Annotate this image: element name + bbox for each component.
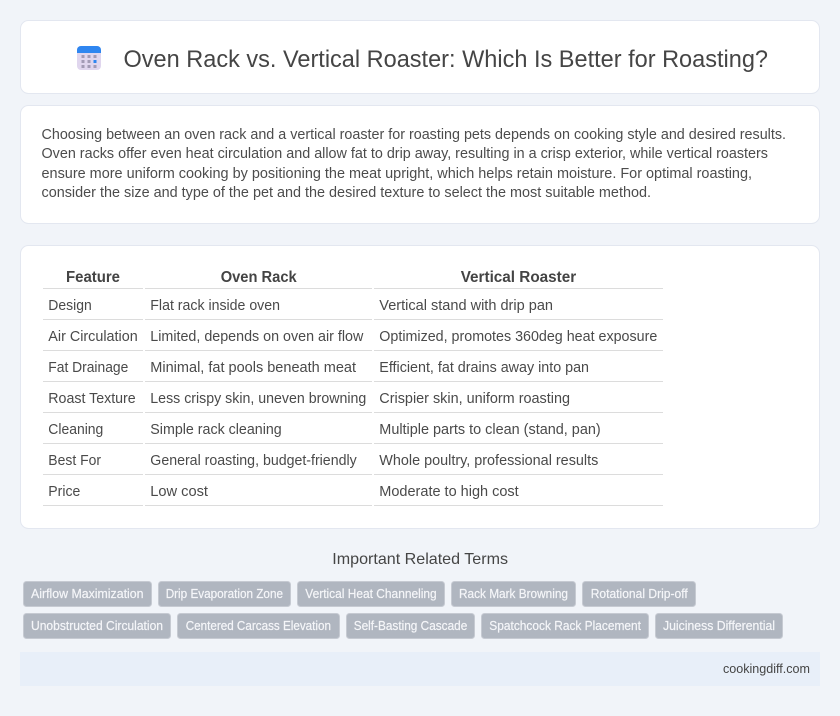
panel: title header bbox=[20, 20, 820, 94]
tag: Rotational Drip-off: Rotational Drip-off bbox=[591, 587, 688, 601]
table row: air circulation: Air Circulation bbox=[48, 329, 138, 345]
table row: air circulation: Optimized, promotes 360deg heat exposure bbox=[379, 329, 657, 345]
table header row: Vertical Roaster bbox=[461, 269, 576, 286]
panel: introduction bbox=[20, 106, 820, 224]
tag: Spatchcock Rack Placement: Spatchcock Rack Placement bbox=[489, 619, 641, 633]
table row: fat drainage: Minimal, fat pools beneath meat bbox=[150, 360, 356, 376]
footer source text: cookingdiff.com bbox=[723, 662, 810, 676]
table row: cleaning: Cleaning bbox=[48, 422, 103, 438]
tag: Vertical Heat Channeling: Vertical Heat Channeling bbox=[305, 587, 437, 601]
table row: design bbox=[48, 298, 553, 314]
table row: cleaning: Multiple parts to clean (stand, pan) bbox=[379, 422, 601, 438]
tag: Airflow Maximization: Airflow Maximization bbox=[31, 587, 144, 601]
table header row: Oven Rack bbox=[221, 269, 297, 286]
text block: introduction paragraph: consider the size and type of the pet and the desired texture to select the most suitable method. bbox=[42, 185, 651, 201]
table row: fat drainage: Efficient, fat drains away into pan bbox=[379, 360, 589, 376]
table row: best for: Best For bbox=[48, 453, 101, 469]
tag: Airflow Maximization bbox=[24, 582, 152, 606]
table row: air circulation bbox=[48, 329, 657, 345]
table row: price bbox=[48, 484, 519, 500]
table row: cleaning bbox=[48, 422, 601, 438]
table row: air circulation: Limited, depends on oven air flow bbox=[150, 329, 364, 345]
table row: best for bbox=[48, 453, 598, 469]
table row: design: Flat rack inside oven bbox=[150, 298, 280, 314]
tag: Rack Mark Browning bbox=[452, 582, 576, 606]
icon: calendar bbox=[77, 46, 101, 70]
table row: design: Design bbox=[48, 298, 92, 314]
tag: Juiciness Differential: Juiciness Differential bbox=[663, 619, 775, 633]
tag: Juiciness Differential bbox=[656, 614, 782, 638]
heading: related terms: Important Related Terms bbox=[332, 551, 508, 568]
table row: price: Low cost bbox=[150, 484, 208, 500]
table row: fat drainage: Fat Drainage bbox=[48, 360, 128, 376]
table row: roast texture: Roast Texture bbox=[48, 391, 136, 407]
table row: best for: General roasting, budget-friendly bbox=[150, 453, 357, 469]
text block: introduction paragraph: Choosing between an oven rack and a vertical roaster for roasting pets depends on cooking style and desired results. bbox=[42, 127, 786, 143]
table header row: Feature bbox=[66, 269, 120, 286]
panel: comparison table bbox=[20, 246, 820, 528]
table row: roast texture bbox=[48, 391, 570, 407]
table row: fat drainage bbox=[48, 360, 589, 376]
tag: Unobstructed Circulation: Unobstructed Circulation bbox=[31, 619, 163, 633]
table header row bbox=[66, 269, 576, 286]
tag: Rotational Drip-off bbox=[582, 582, 696, 606]
table row: price: Moderate to high cost bbox=[379, 484, 519, 500]
related term tags bbox=[24, 582, 782, 638]
tag: Drip Evaporation Zone: Drip Evaporation Zone bbox=[166, 587, 283, 601]
text block: introduction paragraph: ensure more uniform cooking by positioning the meat upright, which helps retain moisture. For optimal roasting, bbox=[42, 166, 752, 182]
tag: Spatchcock Rack Placement bbox=[482, 614, 648, 638]
text block: introduction paragraph bbox=[42, 127, 786, 201]
tag: Self-Basting Cascade: Self-Basting Cascade bbox=[354, 619, 467, 633]
tag: Rack Mark Browning: Rack Mark Browning bbox=[459, 587, 568, 601]
tag: Unobstructed Circulation bbox=[24, 614, 170, 638]
table row: design: Vertical stand with drip pan bbox=[379, 298, 553, 314]
tag: Centered Carcass Elevation: Centered Carcass Elevation bbox=[186, 619, 331, 633]
table row: price: Price bbox=[48, 484, 80, 500]
title: Oven Rack vs. Vertical Roaster: Which Is Better for Roasting? bbox=[124, 46, 768, 73]
table row: cleaning: Simple rack cleaning bbox=[150, 422, 282, 438]
tag: Self-Basting Cascade bbox=[346, 614, 474, 638]
table row: best for: Whole poultry, professional results bbox=[379, 453, 598, 469]
table row: roast texture: Less crispy skin, uneven browning bbox=[150, 391, 366, 407]
text block: introduction paragraph: Oven racks offer even heat circulation and allow fat to drip away, resulting in a crisp exterior, while vertical roasters bbox=[42, 146, 768, 162]
tag: Drip Evaporation Zone bbox=[158, 582, 290, 606]
tag: Vertical Heat Channeling bbox=[298, 582, 444, 606]
tag: Centered Carcass Elevation bbox=[178, 614, 340, 638]
footer bbox=[20, 652, 820, 686]
table row: roast texture: Crispier skin, uniform roasting bbox=[379, 391, 570, 407]
